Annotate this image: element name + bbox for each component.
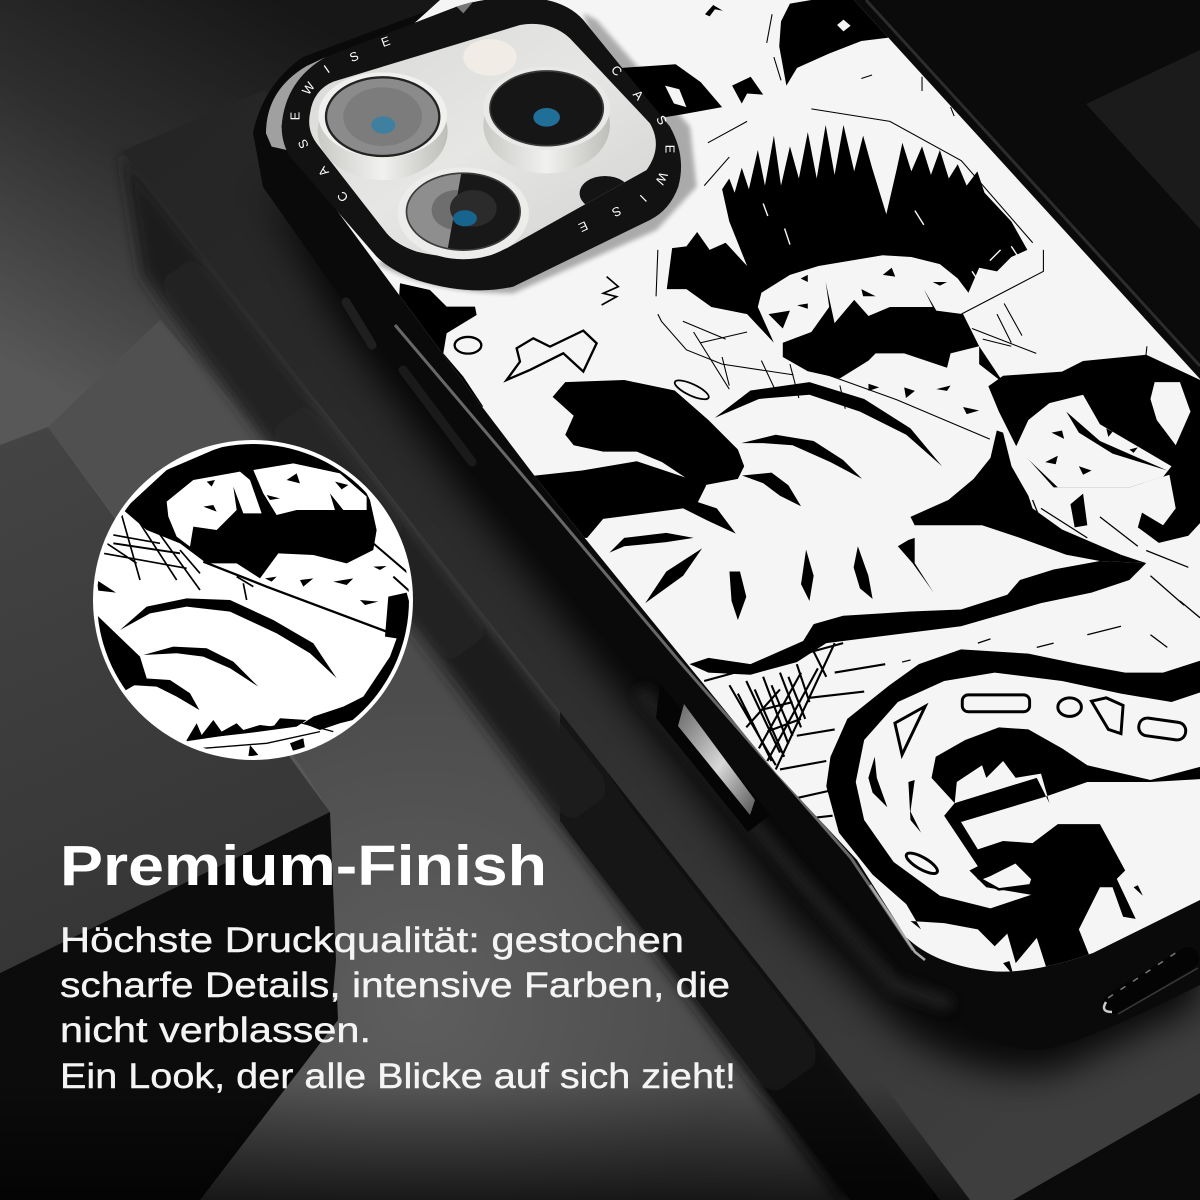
- flash: [463, 39, 517, 76]
- phone shadow: [263, 187, 1200, 1073]
- CASEWISE ring lettering: A: [315, 163, 332, 179]
- CASEWISE ring lettering: E: [663, 145, 677, 153]
- oval: [674, 380, 710, 400]
- CASEWISE ring lettering: W: [652, 170, 670, 187]
- jaw white flecks: [763, 203, 1018, 282]
- teeth line to tentacle: [979, 346, 1000, 380]
- right black mass: [988, 355, 1200, 543]
- fang shape beside camera: [622, 64, 722, 118]
- case ring: [282, 0, 681, 290]
- left fang: [97, 580, 116, 593]
- CASEWISE ring lettering: E: [288, 112, 302, 120]
- lip stroke three: [742, 473, 801, 506]
- bottom squares: [248, 738, 305, 757]
- squiggle outline: [507, 331, 597, 380]
- body text: Ein Look, der alle Blicke auf sich zieht!: [60, 1056, 736, 1096]
- bottom teeth line: [187, 722, 333, 748]
- small squiggle: [602, 277, 618, 305]
- lower left block front face: [0, 812, 336, 1000]
- small oval outline: [455, 337, 481, 354]
- CASEWISE ring lettering: S: [295, 137, 312, 151]
- lip stroke 3: [130, 678, 199, 710]
- lower left block top surface: [0, 427, 330, 973]
- body text: scharfe Details, intensive Farben, die: [60, 965, 730, 1005]
- artwork camera-side scribbles: [397, 277, 618, 407]
- lip stroke 1: [120, 598, 337, 678]
- side sheen: [640, 690, 950, 1005]
- body text: Höchste Druckqualität: gestochen: [60, 920, 684, 960]
- floor surface, upper left: [0, 0, 560, 1000]
- white lip left: [167, 472, 262, 547]
- phone with case: [253, 0, 1200, 1090]
- thorns on left: [103, 515, 253, 600]
- tentacle sucker outlines: [895, 695, 1187, 877]
- CASEWISE ring lettering: S: [348, 49, 361, 65]
- CASEWISE ring lettering: E: [379, 34, 392, 50]
- camera island: [266, 0, 697, 293]
- CASEWISE ring lettering: [288, 34, 677, 234]
- upper wedge: [910, 431, 1146, 563]
- left strokes: [609, 533, 694, 553]
- case body: [253, 0, 1200, 1050]
- lower jaw: [783, 282, 979, 378]
- white tooth panel: [980, 862, 1033, 889]
- body text: nicht verblassen.: [60, 1010, 371, 1050]
- CASEWISE ring lettering: A: [630, 87, 646, 103]
- lip marks: [203, 473, 348, 512]
- CASEWISE ring lettering: W: [299, 80, 318, 97]
- little hook: [705, 5, 723, 16]
- top right block: [1086, 50, 1200, 229]
- white circle border: [93, 440, 413, 760]
- inner curl marks: [868, 757, 887, 807]
- crosshatch building: [704, 643, 885, 818]
- side drips: [1003, 885, 1143, 976]
- lip stroke one: [715, 382, 942, 466]
- CASEWISE ring lettering: C: [608, 63, 625, 79]
- lower lip marks: [265, 566, 387, 605]
- right bezel highlight: [866, 0, 1200, 366]
- enlarged artwork: [93, 437, 413, 757]
- S-curve tentacle: [826, 649, 1200, 990]
- hatch under mass: [1070, 494, 1087, 527]
- light floor band: [147, 320, 850, 1200]
- left black wedge: [93, 615, 147, 692]
- island cast shadow on screen: [377, 13, 697, 293]
- CASEWISE ring lettering: E: [576, 218, 590, 234]
- artwork upper mouth: [622, 0, 1176, 439]
- title: Premium-Finish: [60, 834, 547, 898]
- big blob: [553, 380, 744, 485]
- lens 3: [397, 167, 529, 259]
- CASEWISE ring lettering: C: [335, 189, 351, 204]
- zoom detail circle: [93, 437, 413, 760]
- black tooth inside lip: [1066, 412, 1167, 471]
- thin lines and thorns: [656, 14, 1176, 439]
- CASEWISE ring lettering: S: [610, 203, 623, 219]
- charging port: [1104, 950, 1198, 1014]
- top lip blob: [779, 0, 890, 86]
- white blob in mass: [1150, 382, 1190, 445]
- CASEWISE ring lettering: I: [637, 192, 649, 204]
- silver crescent edge: [266, 57, 327, 150]
- side button long: [403, 370, 472, 462]
- lip stroke two: [741, 435, 862, 479]
- body text: [60, 920, 736, 1096]
- white lip right: [253, 463, 367, 515]
- gum marks: [769, 268, 979, 414]
- side button upper: [346, 302, 372, 345]
- thorny dark corner: [397, 283, 483, 407]
- lip stroke 2: [143, 647, 258, 687]
- CASEWISE ring lettering: I: [321, 63, 332, 76]
- lower lip band: [689, 561, 1146, 675]
- lens 2: [483, 67, 610, 173]
- chrome side button: [656, 684, 770, 832]
- bottom fade: [200, 1096, 970, 1200]
- upper jaw with jagged teeth: [667, 125, 1027, 343]
- tear marks: [729, 572, 746, 620]
- clear camera window: [309, 24, 656, 257]
- artwork central lips and tentacles: [523, 355, 1200, 990]
- ring gloss: [457, 2, 473, 13]
- lower lip line: [203, 562, 387, 632]
- right blob and band: [303, 593, 413, 730]
- glossy bezel highlight: [395, 325, 913, 950]
- central block side face: [120, 156, 850, 1200]
- screen: white printed artwork: [336, 0, 1200, 972]
- CASEWISE ring lettering: S: [653, 113, 670, 127]
- top black cap: [123, 437, 377, 578]
- white lip patch: [1016, 395, 1172, 487]
- lens 1: [318, 72, 448, 180]
- left arm: [523, 461, 736, 538]
- lidar dot: [580, 176, 630, 211]
